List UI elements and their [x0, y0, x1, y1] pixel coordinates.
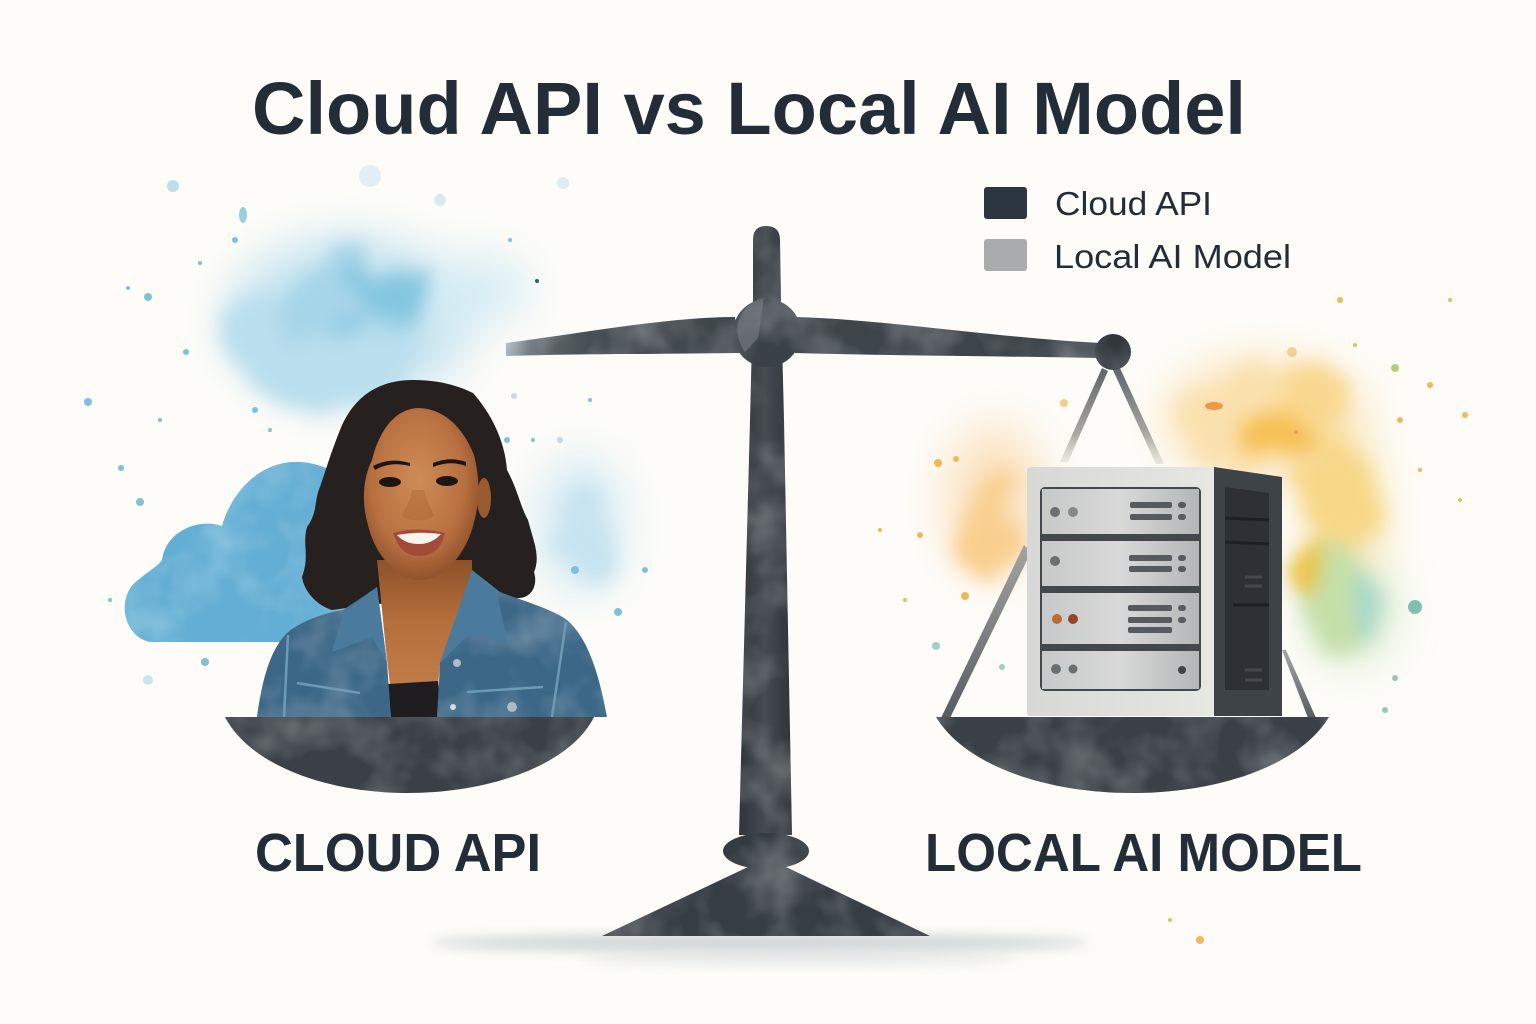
smile	[393, 530, 445, 556]
legend label: Cloud API: Cloud API	[1055, 185, 1212, 222]
scale beam: left arm	[506, 317, 740, 356]
watercolor splash: blue	[225, 235, 625, 595]
server illustration	[1027, 467, 1282, 716]
legend	[984, 185, 1291, 275]
watercolor splash: orange and green	[945, 360, 1393, 660]
balance scale	[506, 226, 1316, 936]
label: Local AI Model: LOCAL AI MODEL	[925, 823, 1362, 883]
eyes and brows	[373, 459, 466, 487]
scale post and beam	[506, 226, 1131, 936]
hair	[302, 380, 537, 610]
undershirt	[386, 681, 442, 717]
server unit 4	[1042, 651, 1199, 689]
scale post	[739, 226, 792, 835]
scale strings: right pan	[941, 366, 1316, 718]
face	[364, 408, 478, 580]
beam right knob	[1095, 334, 1131, 370]
label: Cloud API: CLOUD API	[255, 823, 541, 883]
pivot highlight	[737, 298, 764, 352]
side panel	[1225, 487, 1269, 690]
beam pivot	[733, 299, 801, 367]
legend label: Local AI Model: Local AI Model	[1054, 238, 1291, 275]
title: Cloud API vs Local AI Model	[252, 67, 1246, 150]
server side	[1214, 467, 1282, 716]
scale beam: right arm	[795, 317, 1100, 358]
server front	[1027, 467, 1214, 716]
server rack backing	[1040, 487, 1201, 691]
legend swatch: Cloud API	[984, 187, 1027, 219]
jacket collars and details	[284, 570, 566, 717]
left scale pan	[225, 717, 594, 793]
jacket	[257, 570, 607, 717]
paint speckles	[84, 165, 1468, 944]
icon: blue cloud	[125, 462, 360, 642]
nose	[402, 490, 434, 520]
person illustration	[257, 380, 607, 717]
server unit 2	[1042, 541, 1199, 586]
ground shadow	[430, 934, 1090, 966]
server unit 3	[1042, 593, 1199, 644]
ear	[477, 478, 491, 518]
scale base	[602, 867, 930, 936]
server unit 1	[1042, 489, 1199, 534]
neck	[377, 560, 472, 685]
right scale pan	[936, 717, 1329, 793]
base collar	[723, 833, 809, 869]
legend swatch: Local AI Model	[984, 239, 1027, 271]
